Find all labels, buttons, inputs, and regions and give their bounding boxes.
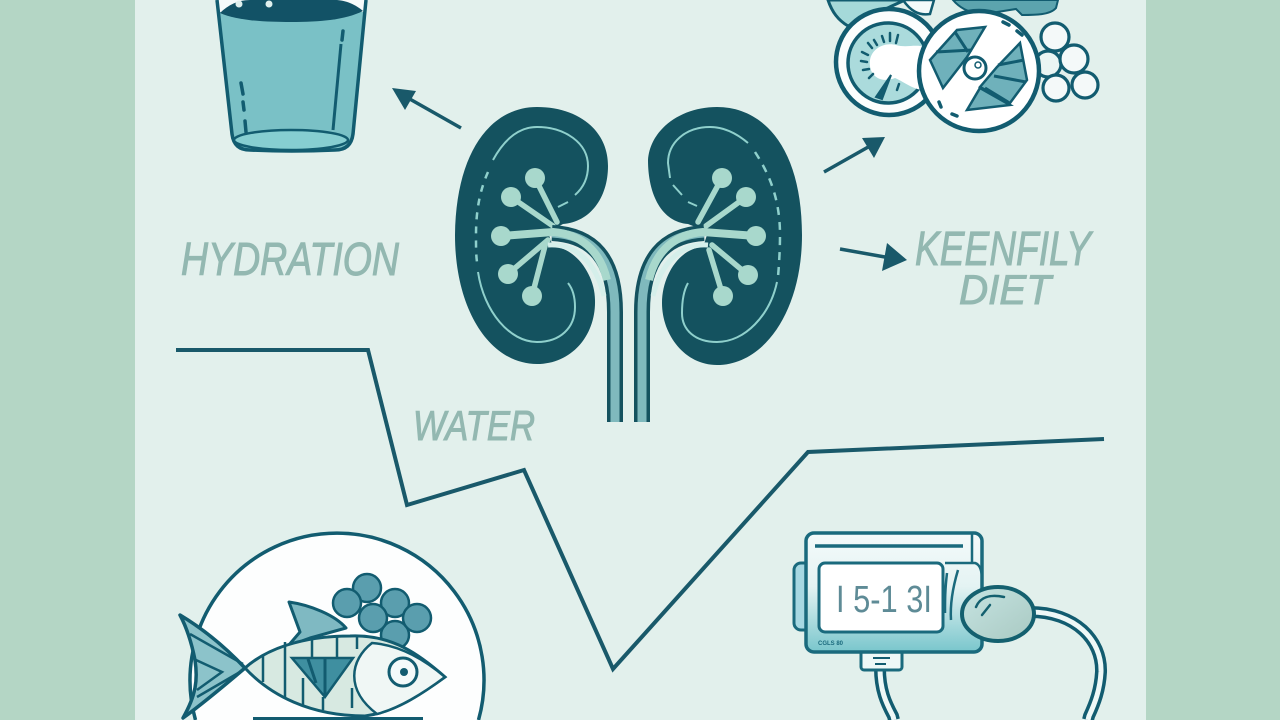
left citrus slice bbox=[836, 9, 942, 115]
grapes bbox=[1035, 23, 1098, 101]
leaf greens bbox=[828, 0, 1058, 26]
eye bbox=[389, 658, 417, 686]
small device label: CGLS 80 bbox=[818, 641, 844, 647]
left ureter bbox=[501, 232, 615, 422]
kidneys illustration bbox=[455, 107, 802, 422]
screen with reading bbox=[819, 563, 943, 632]
central panel bbox=[135, 0, 1146, 720]
bulb bbox=[962, 587, 1034, 641]
tail fin bbox=[180, 615, 245, 718]
berries bbox=[333, 574, 431, 649]
dark plate base bbox=[253, 717, 423, 720]
label: keenly: KEENFILY bbox=[915, 223, 1093, 276]
right ureter bbox=[642, 232, 756, 422]
tubes bbox=[880, 612, 1101, 720]
right citrus slice bbox=[919, 11, 1039, 131]
right kidney bbox=[648, 107, 802, 365]
left kidney bbox=[455, 107, 608, 364]
icon: fish with berries on plate bbox=[180, 533, 484, 720]
fish body bbox=[245, 635, 445, 716]
arrow: kidneys to glass bbox=[392, 88, 461, 128]
arrow: kidneys to diet label bbox=[840, 243, 907, 271]
side tab bbox=[794, 563, 812, 630]
screen with reading: I 5-1 3I bbox=[836, 579, 932, 621]
label: water: WATER bbox=[413, 402, 535, 449]
icon: blood pressure monitor bbox=[794, 533, 1101, 720]
monitor body bbox=[806, 533, 982, 652]
icon: citrus and grapes food group bbox=[828, 0, 1098, 131]
plate circle bbox=[190, 533, 484, 720]
icon: water glass bbox=[217, 0, 366, 151]
trend line bbox=[176, 350, 1104, 669]
label: hydration: HYDRATION bbox=[181, 233, 400, 285]
label: diet: DIET bbox=[959, 266, 1054, 313]
dorsal fin bbox=[288, 602, 346, 646]
arrow: kidneys to food bbox=[824, 137, 885, 172]
triangular fin bbox=[292, 658, 353, 697]
connector bbox=[861, 650, 902, 670]
